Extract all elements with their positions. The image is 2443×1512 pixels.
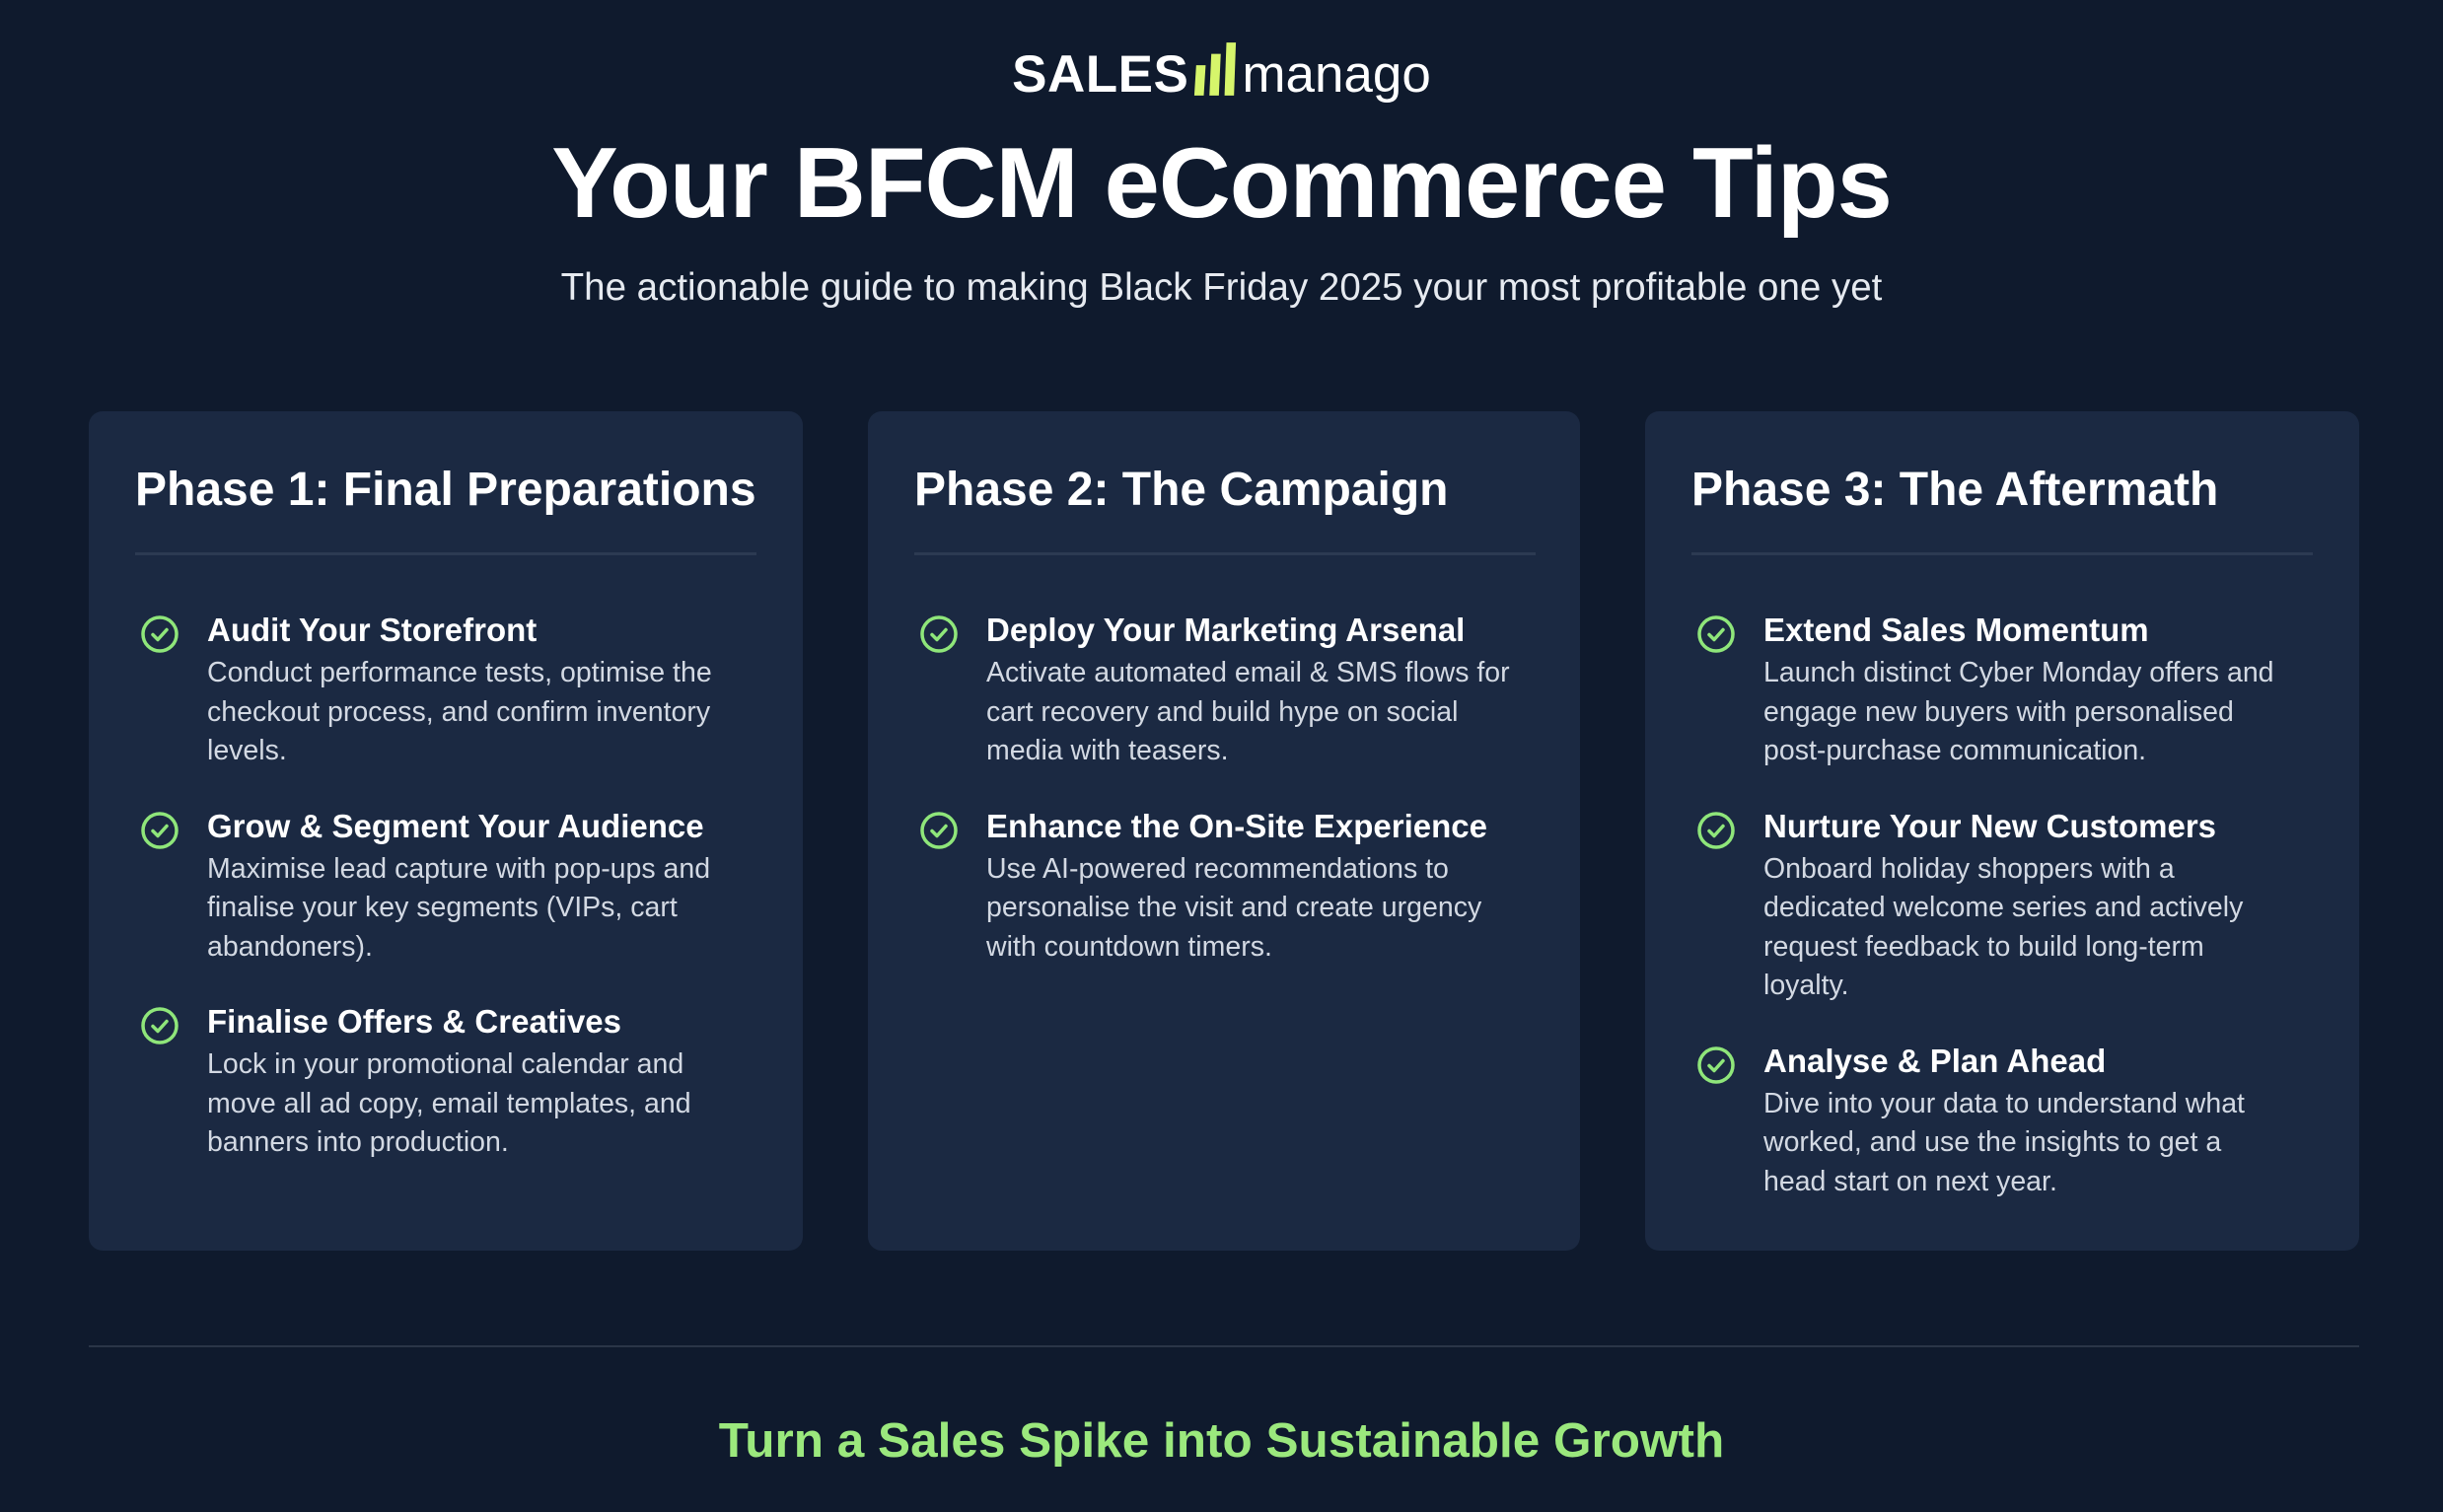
item: finalise offers: banners into production. [207, 1126, 509, 1158]
item: deploy marketing [920, 612, 1510, 766]
panel: phase 2 [868, 411, 1580, 1251]
item: analyse & plan: Analyse & Plan Ahead [1763, 1042, 2106, 1079]
item: finalise offers: Finalise Offers & Creatives [207, 1003, 621, 1040]
item: analyse & plan: head start on next year. [1763, 1166, 2057, 1197]
item: analyse & plan: Dive into your data to understand what [1763, 1087, 2245, 1118]
list: phase 3 items [1697, 612, 2274, 1197]
item: finalise offers [141, 1003, 691, 1158]
item: deploy marketing: cart recovery and build hype on social [986, 696, 1458, 728]
item: nurture customers: Nurture Your New Customers [1763, 807, 2216, 844]
item: nurture customers [1697, 807, 2243, 1001]
item: extend momentum: Launch distinct Cyber Monday offers and [1763, 657, 2274, 688]
item: extend momentum: engage new buyers with personalised [1763, 696, 2234, 728]
item: nurture customers: Onboard holiday shoppers with a [1763, 852, 2175, 884]
item: on-site experience: personalise the visit and create urgency [986, 892, 1481, 923]
item: grow audience: Grow & Segment Your Audience [207, 807, 704, 844]
item: extend momentum: Extend Sales Momentum [1763, 612, 2149, 648]
item: extend momentum [1697, 612, 2274, 766]
item: on-site experience: Use AI-powered recommendations to [986, 852, 1449, 884]
item: grow audience [141, 807, 710, 963]
footer tagline: Turn a Sales Spike into Sustainable Growth [719, 1413, 1724, 1468]
logo: SALES manago [1012, 45, 1431, 104]
title: Your BFCM eCommerce Tips [551, 128, 1892, 239]
list: phase 1 items [141, 612, 712, 1158]
item: on-site experience: Enhance the On-Site Experience [986, 807, 1487, 844]
item: nurture customers: loyalty. [1763, 970, 1849, 1001]
item: on-site experience: with countdown timers. [986, 931, 1272, 963]
item: deploy marketing: Activate automated email & SMS flows for [986, 657, 1510, 688]
item: audit storefront: levels. [207, 735, 287, 766]
item: nurture customers: request feedback to build long-term [1763, 931, 2204, 963]
item: grow audience: Maximise lead capture with pop-ups and [207, 852, 710, 884]
subtitle: The actionable guide to making Black Friday 2025 your most profitable one yet [561, 266, 1882, 309]
list: phase 2 items [920, 612, 1510, 963]
item: analyse & plan [1697, 1042, 2245, 1197]
item: deploy marketing: media with teasers. [986, 735, 1229, 766]
item: audit storefront [141, 612, 712, 766]
item: deploy marketing: Deploy Your Marketing Arsenal [986, 612, 1465, 648]
heading: phase 1: Phase 1: Final Preparations [135, 464, 756, 516]
item: analyse & plan: worked, and use the insights to get a [1763, 1126, 2221, 1158]
item: nurture customers: dedicated welcome series and actively [1763, 892, 2243, 923]
item: finalise offers: Lock in your promotional calendar and [207, 1048, 683, 1080]
heading: phase 2: Phase 2: The Campaign [914, 464, 1448, 516]
item: audit storefront: checkout process, and confirm inventory [207, 696, 710, 728]
item: grow audience: finalise your key segments (VIPs, cart [207, 892, 678, 923]
panel: phase 3 [1645, 411, 2359, 1251]
item: audit storefront: Audit Your Storefront [207, 612, 537, 648]
heading: phase 3: Phase 3: The Aftermath [1691, 464, 2218, 516]
item: extend momentum: post-purchase communication. [1763, 735, 2146, 766]
panel: phase 1 [89, 411, 803, 1251]
item: grow audience: abandoners). [207, 931, 373, 963]
item: on-site experience [920, 807, 1487, 963]
item: audit storefront: Conduct performance tests, optimise the [207, 657, 712, 688]
item: finalise offers: move all ad copy, email templates, and [207, 1087, 691, 1118]
